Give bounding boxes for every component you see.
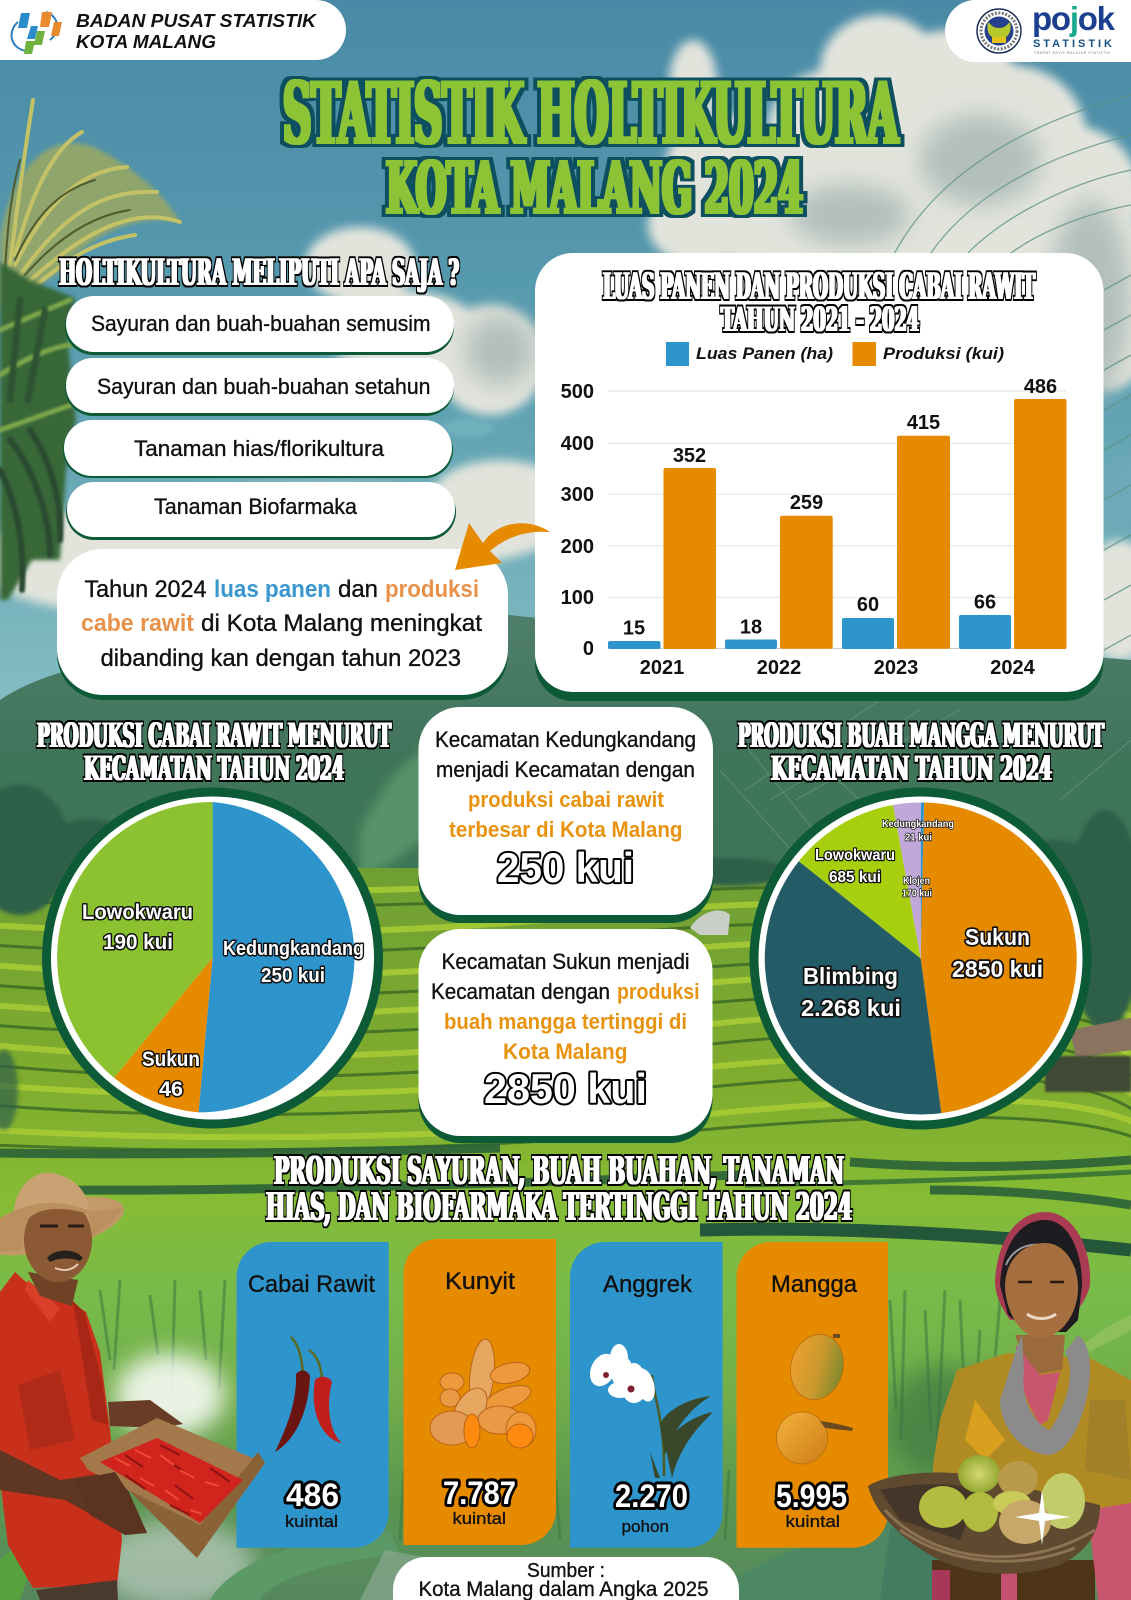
chili peppers in box (100, 1438, 243, 1523)
bar values: 18 (740, 616, 762, 638)
bar values: 486 (1024, 376, 1057, 398)
card: cabai rawit: 486 (286, 1477, 339, 1513)
pill: sayuran semusim: Sayuran dan buah-buahan semusim (91, 311, 430, 336)
callout: luas panen meningkat: dibanding kan dengan tahun 2023 (100, 645, 461, 672)
pill: sayuran setahun (65, 358, 454, 416)
pill: biofarmaka (66, 482, 456, 540)
chart title: TAHUN 2021 - 2024 (721, 300, 919, 340)
pie labels: Klojen (903, 875, 930, 887)
pie chart: cabai rawit (42, 788, 383, 1128)
palm tree (0, 100, 180, 600)
callout: luas panen meningkat: produksi (385, 576, 479, 603)
callout: luas panen meningkat: luas panen (214, 576, 331, 603)
callout: sukun: Kecamatan Sukun menjadi (442, 949, 690, 974)
grid lines and axis: 0 (583, 638, 594, 660)
bars (608, 399, 1066, 649)
icon: mangoes (776, 1329, 853, 1464)
arms (108, 1400, 183, 1428)
year labels: 2024 (990, 657, 1036, 679)
callout: sukun: 2850 kui (484, 1065, 647, 1112)
year labels (640, 657, 1036, 679)
callout: sukun: buah mangga tertinggi di (444, 1009, 687, 1034)
pie labels: Kedungkandang (882, 818, 954, 830)
pill: sayuran setahun: Sayuran dan buah-buahan setahun (97, 374, 430, 399)
woven basket (868, 1473, 1100, 1574)
foreground leaves (0, 1315, 1131, 1600)
grid lines and axis: 100 (561, 587, 594, 609)
illustration: farmer woman with mango basket (868, 1212, 1131, 1600)
rice stalks (100, 1280, 1000, 1540)
callout: kedungkandang: produksi cabai rawit (468, 787, 665, 812)
bar values: 66 (974, 592, 996, 614)
logo header right: UM and Pojok Statistik (945, 0, 1131, 62)
card: cabai rawit: kuintal (285, 1512, 338, 1531)
logo header left: BPS: BADAN PUSAT STATISTIK (76, 10, 318, 31)
sash (1090, 1503, 1131, 1600)
hand on box (75, 1472, 147, 1535)
logo header left: BPS: KOTA MALANG (76, 31, 216, 52)
grid lines and axis: 200 (561, 536, 594, 558)
callout: sukun: produksi (617, 979, 700, 1004)
icon: chili peppers (275, 1337, 342, 1452)
heading: HOLTIKULTURA MELIPUTI APA SAJA ? (59, 252, 459, 294)
wooden box (80, 1418, 265, 1558)
pie labels: Lowokwaru (815, 847, 895, 864)
pie labels: 685 kui (829, 869, 881, 886)
callout: luas panen meningkat: dan (338, 576, 378, 603)
hat brim (0, 1185, 130, 1267)
callout: kedungkandang: menjadi Kecamatan dengan (436, 757, 695, 782)
bar values (623, 376, 1057, 640)
panel: bar chart cabai rawit (535, 253, 1104, 701)
card: mangga: Mangga (771, 1271, 858, 1298)
card: anggrek: 2.270 (615, 1478, 688, 1514)
pie labels (82, 901, 364, 1101)
pie labels: 2850 kui (952, 956, 1043, 982)
card: cabai rawit: Cabai Rawit (248, 1271, 375, 1298)
sparkle (1015, 1490, 1070, 1545)
mountains (0, 609, 1131, 900)
rice field (0, 868, 1131, 1600)
hat crown (14, 1173, 90, 1212)
grid lines and axis: 300 (561, 484, 594, 506)
grid lines and axis: 400 (561, 433, 594, 455)
legend: Produksi (kui) (883, 344, 1004, 363)
callout: kedungkandang: Kecamatan Kedungkandang (435, 727, 696, 752)
icon: BPS logo (12, 12, 62, 54)
callout: kedungkandang: 250 kui (497, 844, 634, 891)
face (1005, 1243, 1078, 1338)
bar values: 415 (907, 412, 940, 434)
pill: tanaman hias: Tanaman hias/florikultura (134, 436, 385, 461)
illustration: farmer with chili box (0, 1173, 265, 1600)
head scarf (995, 1212, 1090, 1320)
card: mangga (736, 1242, 888, 1548)
card: kunyit (404, 1239, 556, 1545)
farm hut and rock (690, 910, 1131, 1092)
panel: holtikultura meliputi apa saja (57, 252, 508, 700)
source note (393, 1557, 739, 1600)
callout: luas panen meningkat: Tahun 2024 (84, 576, 206, 603)
neck and pink collar (1015, 1335, 1065, 1375)
pie labels (801, 818, 1043, 1021)
terrace lines (0, 872, 1131, 1250)
tree line (0, 785, 1131, 1130)
heading: produksi buah mangga (738, 716, 1104, 789)
pie labels: Kedungkandang (223, 938, 364, 960)
pie labels: 2.268 kui (801, 995, 901, 1021)
text: pojok: pojok (1032, 0, 1116, 37)
bar values: 15 (623, 618, 645, 640)
card: anggrek: Anggrek (603, 1271, 693, 1298)
pill: sayuran semusim (65, 296, 454, 355)
text: PRODUKSI CABAI RAWIT MENURUT (37, 716, 391, 756)
pill: biofarmaka: Tanaman Biofarmaka (154, 494, 358, 519)
card: anggrek (570, 1242, 723, 1548)
bar values: 60 (857, 594, 879, 616)
face (24, 1198, 92, 1282)
callout: luas panen meningkat (57, 549, 508, 700)
pie labels: 250 kui (261, 965, 325, 987)
arrow (455, 523, 550, 570)
pie labels: 21 kui (905, 832, 932, 844)
card: kunyit: Kunyit (445, 1268, 515, 1295)
pie labels: Blimbing (803, 963, 898, 989)
pill: tanaman hias (63, 420, 453, 478)
legend: Luas Panen (ha) (696, 344, 833, 363)
gray scarf (1000, 1335, 1090, 1455)
pie labels: 190 kui (103, 931, 173, 954)
year labels: 2021 (640, 657, 684, 679)
source note: Sumber : (527, 1560, 605, 1582)
lower body (932, 1560, 1095, 1600)
callout: luas panen meningkat: di Kota Malang meningkat (201, 610, 482, 637)
pie chart: buah mangga (750, 788, 1092, 1130)
callout: luas panen meningkat: cabe rawit (81, 610, 194, 637)
pie labels: Sukun (965, 924, 1030, 950)
shirt (0, 1272, 122, 1588)
card: anggrek: pohon (622, 1517, 669, 1536)
blouse (933, 1353, 1131, 1540)
icon: university emblem (977, 9, 1021, 53)
card: kunyit: 7.787 (443, 1475, 516, 1511)
neck (28, 1272, 78, 1306)
icon: orchid (585, 1344, 713, 1478)
logo header left: BPS (0, 0, 346, 60)
pie labels: Lowokwaru (82, 901, 193, 924)
card: kunyit: kuintal (452, 1509, 506, 1528)
callout: sukun (418, 929, 712, 1143)
green contour arcs (890, 95, 1131, 650)
callout: sukun: Kota Malang (503, 1039, 628, 1064)
pie labels: 170 kui (902, 888, 932, 900)
net lines (720, 700, 1131, 860)
logo header right: UM and Pojok Statistik: STATISTIK (1033, 38, 1112, 50)
bar values: 259 (790, 492, 823, 514)
card: mangga: kuintal (786, 1512, 840, 1531)
card: cabai rawit (236, 1242, 389, 1548)
heading: produksi tertinggi (266, 1148, 852, 1229)
grid lines and axis: 500 (561, 381, 594, 403)
logo header right: UM and Pojok Statistik: TEMPAT ASYIK BELAJAR STATISTIK (1034, 51, 1111, 55)
heading: produksi cabai rawit: KECAMATAN TAHUN 2024 (84, 749, 344, 789)
title (283, 64, 899, 230)
pie labels: Sukun (142, 1048, 200, 1071)
callout: sukun: Kecamatan dengan (431, 979, 610, 1004)
year labels: 2023 (874, 657, 918, 679)
heading: produksi cabai rawit (37, 716, 391, 789)
clouds (0, 15, 1131, 660)
bar values: 352 (673, 445, 706, 467)
icon: turmeric (430, 1338, 536, 1448)
pie labels: 46 (159, 1078, 183, 1101)
grid lines and axis (561, 381, 1066, 660)
card: mangga: 5.995 (776, 1478, 847, 1514)
mangoes in basket (919, 1455, 1085, 1544)
callout: kedungkandang: terbesar di Kota Malang (449, 817, 682, 842)
year labels: 2022 (757, 657, 801, 679)
callout: kedungkandang (418, 707, 713, 923)
legend (666, 342, 1004, 366)
chart title (603, 266, 1035, 340)
